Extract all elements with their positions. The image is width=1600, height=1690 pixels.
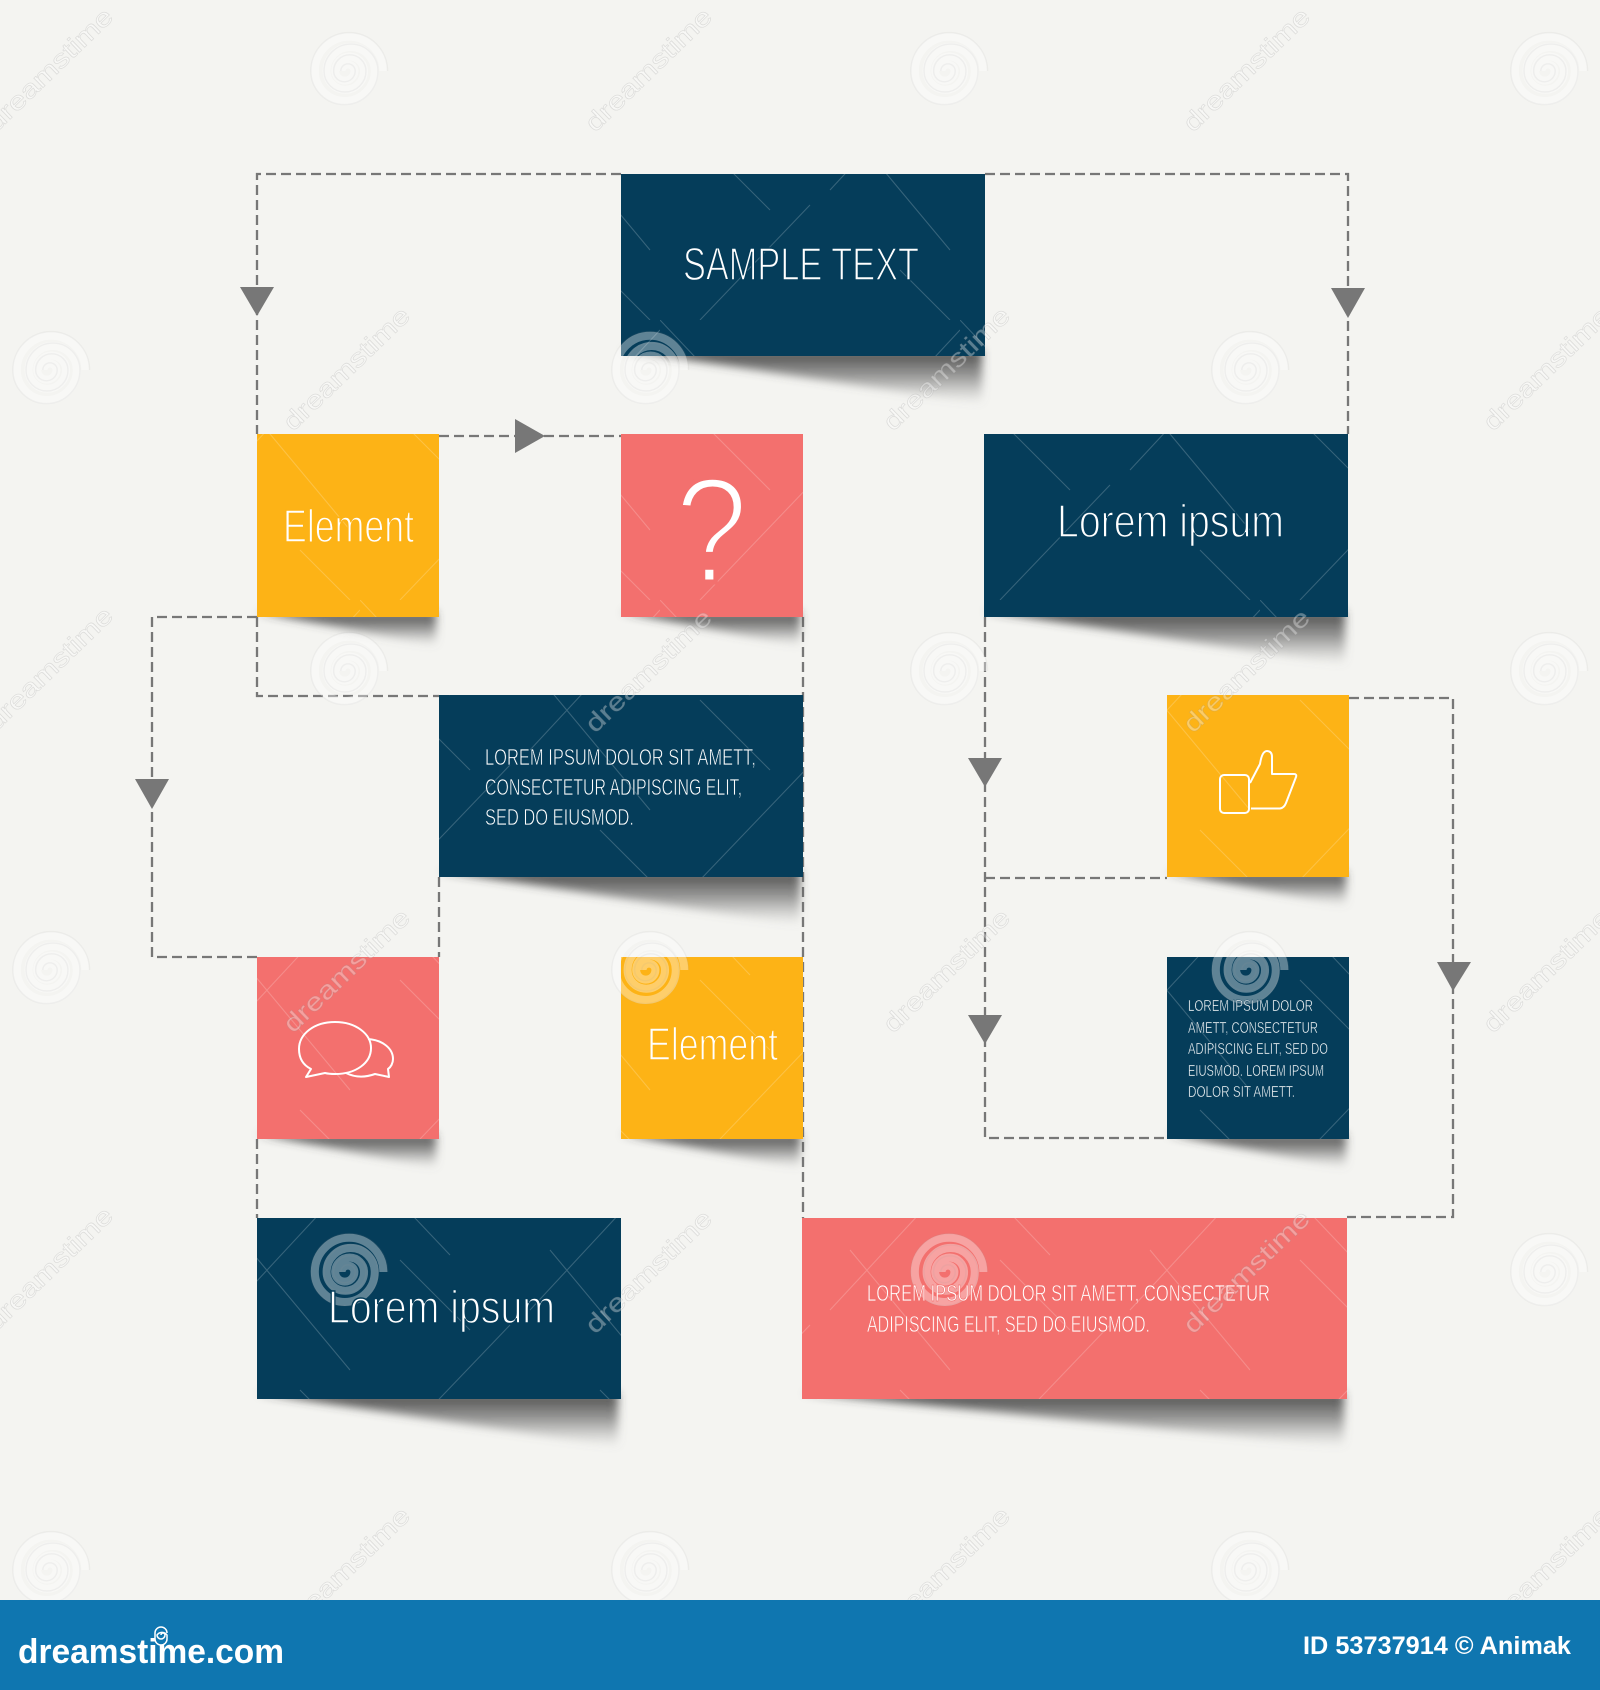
connector: right box down to small text box: [985, 617, 1167, 1138]
panel: salmon text box: [802, 1218, 1347, 1447]
icon: chat bubbles: [299, 1022, 393, 1077]
panel: small text box: [1167, 957, 1349, 1168]
icon: question mark: ?: [675, 446, 748, 614]
text: dreamstime: [878, 1502, 1016, 1636]
footer logo: dreamstime.com: [18, 1633, 284, 1671]
panel: question box: [621, 434, 803, 646]
connector: chat box to bottom navy box: [256, 1139, 258, 1218]
text: dreamstime: [278, 904, 416, 1038]
text block: small paragraph: LOREM IPSUM DOLOR: [1188, 998, 1313, 1015]
panel: thumbs up box: [1167, 695, 1349, 906]
panel: lorem ipsum right: [984, 434, 1348, 665]
text: dreamstime: [580, 3, 718, 137]
text: dreamstime: [1478, 904, 1600, 1038]
connector: question to bottom salmon box: [802, 617, 804, 1218]
panel: chat box: [257, 957, 439, 1168]
arrow: left down: [240, 287, 274, 316]
label: lorem ipsum right: Lorem ipsum: [1057, 495, 1284, 547]
panel: lorem ipsum bottom: [257, 1218, 621, 1447]
label: element left: Element: [283, 500, 414, 552]
text block: small paragraph: ADIPISCING ELIT, SED DO: [1188, 1041, 1328, 1058]
arrow: right column upper: [968, 758, 1002, 787]
text block: paragraph: [485, 744, 756, 830]
text: dreamstime: [1178, 3, 1316, 137]
text block: paragraph: SED DO EIUSMOD.: [485, 804, 634, 830]
dashed connectors: [152, 174, 1453, 1218]
text block: small paragraph: EIUSMOD. LOREM IPSUM: [1188, 1063, 1324, 1080]
connector: element to question: [439, 435, 621, 437]
footer credit: ID 53737914 © Animak: [1303, 1632, 1571, 1660]
text: dreamstime: [1178, 1205, 1316, 1339]
text: dreamstime: [878, 904, 1016, 1038]
text: dreamstime: [1178, 604, 1316, 738]
text: dreamstime: [580, 1205, 718, 1339]
connector: text box to chat box: [438, 877, 440, 957]
arrowheads: [135, 287, 1471, 1044]
text: dreamstime: [580, 604, 718, 738]
text block: paragraph: CONSECTETUR ADIPISCING ELIT,: [485, 774, 742, 800]
connector: top box to right box: [985, 174, 1348, 434]
text: dreamstime: [1478, 1502, 1600, 1636]
icon: thumbs up: [1220, 751, 1296, 813]
connector: top box to left element: [257, 174, 621, 434]
label: element right: Element: [647, 1018, 778, 1070]
text: dreamstime: [878, 302, 1016, 436]
footer bar: [0, 1600, 1600, 1690]
panel: paragraph box: [439, 695, 803, 925]
arrow: far left down: [135, 779, 169, 809]
arrow: to question: [515, 419, 545, 453]
text block: salmon paragraph: ADIPISCING ELIT, SED DO EIUSMOD.: [867, 1311, 1150, 1337]
text block: small paragraph: AMETT, CONSECTETUR: [1188, 1020, 1318, 1037]
arrow: right column lower: [968, 1015, 1002, 1044]
panel: element left: [257, 434, 439, 646]
connector: thumb box to salmon box: [1347, 698, 1453, 1217]
text: dreamstime: [278, 302, 416, 436]
arrow: right down: [1331, 288, 1365, 318]
connector: thumb box to centre line: [985, 877, 1167, 879]
connector: element to chat box: [152, 617, 257, 957]
connector: element to text box: [257, 617, 439, 696]
text block: salmon paragraph: [867, 1280, 1270, 1337]
heading: sample text: SAMPLE TEXT: [683, 238, 919, 290]
text block: salmon paragraph: LOREM IPSUM DOLOR SIT AMETT, CONSECTETUR: [867, 1280, 1270, 1306]
panel: element right: [621, 957, 803, 1168]
text block: small paragraph: [1188, 998, 1328, 1101]
panel: sample text box: [621, 174, 985, 404]
label: lorem ipsum bottom: Lorem ipsum: [328, 1281, 555, 1333]
text: dreamstime: [278, 1502, 416, 1636]
text block: small paragraph: DOLOR SIT AMETT.: [1188, 1084, 1295, 1101]
arrow: far right down: [1437, 962, 1471, 991]
text: dreamstime: [1478, 302, 1600, 436]
icon: logo spiral: [155, 1627, 167, 1645]
text block: paragraph: LOREM IPSUM DOLOR SIT AMETT,: [485, 744, 756, 770]
